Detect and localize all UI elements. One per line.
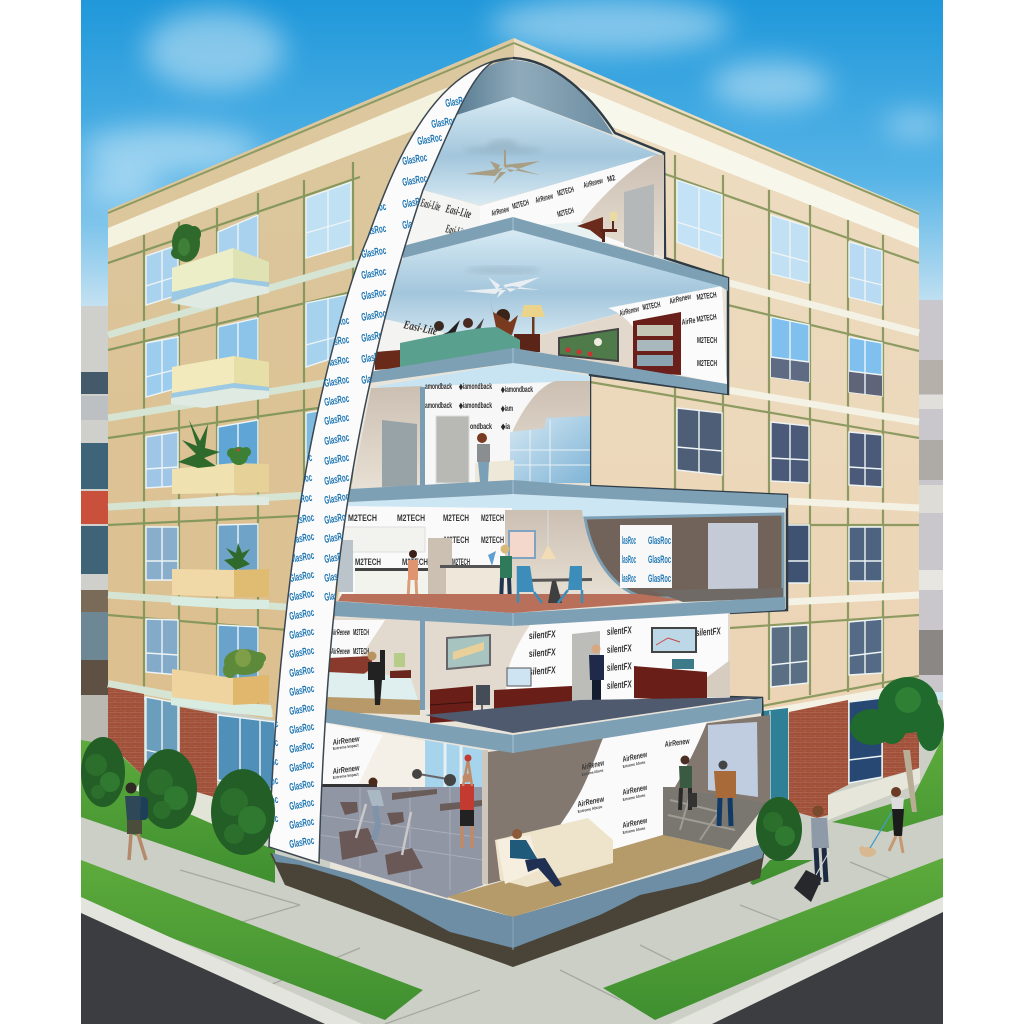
M2Tech text: M2TECH xyxy=(452,557,470,567)
GlasRoc repeating text: GlasRoc xyxy=(288,588,315,604)
left wall windows xyxy=(146,182,351,790)
tree xyxy=(850,677,944,812)
bookcase xyxy=(633,312,681,375)
gym floor xyxy=(318,787,483,898)
M2Tech text: M2TECH xyxy=(402,557,428,567)
brand text xyxy=(402,290,717,368)
GlasRoc repeating text: GlasRoc xyxy=(360,329,387,345)
GlasRoc repeating text: GlasRoc xyxy=(360,223,387,239)
woman with dress xyxy=(368,650,385,705)
brand text: M2TECH xyxy=(556,206,575,219)
AirRenew gym xyxy=(331,734,361,780)
GlasRoc repeating text: GlasRoc xyxy=(288,740,315,756)
dresser xyxy=(430,686,473,723)
GlasRoc repeating text: GlasRoc xyxy=(323,588,350,604)
M2Tech text: M2TECH xyxy=(444,535,469,545)
GlasRoc repeating text: GlasRoc xyxy=(323,432,350,448)
GlasRoc repeating text: GlasRoc xyxy=(323,393,350,409)
ceiling xyxy=(423,97,660,205)
GlasRoc repeating text: GlasRoc xyxy=(323,491,350,507)
GlasRoc repeating text: GlasRoc xyxy=(288,816,315,832)
GlasRoc repeating text: GlasRoc xyxy=(323,472,350,488)
ground floor room: AirRenew xyxy=(621,783,648,797)
silentFX text: silentFX xyxy=(528,647,557,660)
GlasRoc SmartLiner text: GlasRoc xyxy=(648,573,671,585)
parapet right xyxy=(514,60,919,248)
weight bench xyxy=(392,769,482,811)
GlasRoc repeating text: GlasRoc xyxy=(252,680,279,696)
M2Tech text xyxy=(348,513,504,567)
Diamondback text: ondback xyxy=(470,422,492,431)
silentFX text: silentFX xyxy=(606,643,633,656)
AirRenew gym: AirRenew xyxy=(331,734,361,747)
AirRenew text: AirRenew xyxy=(330,628,350,637)
fridge xyxy=(338,540,353,592)
GlasRoc repeating text xyxy=(272,96,465,848)
brand text xyxy=(419,173,617,240)
balcony 3 with plants xyxy=(171,420,269,507)
framed art xyxy=(447,635,490,669)
silentFX text: silentFX xyxy=(606,661,633,674)
lawn upper right xyxy=(750,737,943,885)
ground floor room: Extreme Abuse xyxy=(622,792,646,802)
floor 2 room: M2TECH xyxy=(353,647,369,656)
sofa xyxy=(495,818,613,887)
ground floor room: AirRenew xyxy=(580,758,605,772)
credenza xyxy=(634,659,707,702)
bush 1 xyxy=(81,737,125,807)
GlasRoc repeating text: GlasRoc xyxy=(360,371,387,387)
sofa xyxy=(400,327,520,368)
AirRenew text xyxy=(330,628,369,656)
door xyxy=(572,631,600,702)
Diamondback text: ◆iamondback xyxy=(458,382,492,391)
trim xyxy=(590,155,919,706)
office chair xyxy=(476,685,490,714)
gym back wall xyxy=(323,722,487,790)
GlasRoc repeating text: GlasRoc xyxy=(252,775,279,791)
brand text: M2TECH xyxy=(696,290,717,302)
patterned floor xyxy=(663,787,767,850)
brand text: M2TECH xyxy=(697,336,717,345)
parapet left xyxy=(108,60,514,248)
GlasRoc repeating text: GlasRoc xyxy=(323,412,350,428)
building left wall xyxy=(108,38,514,720)
dark corridor xyxy=(585,514,783,598)
brand text: Easi-Lite xyxy=(444,221,467,240)
bush 4 xyxy=(756,797,802,861)
GlasRoc repeating text: GlasRoc xyxy=(360,201,387,217)
brick base left xyxy=(108,687,217,826)
GlasRoc repeating text: GlasRoc xyxy=(360,245,387,261)
upper cabinets xyxy=(343,527,425,552)
GlasRoc repeating text: GlasRoc xyxy=(288,664,315,680)
pedestrian with suitcase xyxy=(794,806,829,902)
back walls xyxy=(372,318,500,380)
traveller xyxy=(679,756,697,810)
GlasRoc repeating text: GlasRoc xyxy=(288,626,315,642)
Diamondback text: amondback xyxy=(425,382,452,391)
building right wall xyxy=(514,38,919,714)
M2Tech text: M2TECH xyxy=(348,513,377,523)
GlasRoc repeating text: GlasRoc xyxy=(401,152,428,168)
Diamondback text: ◆iamondback xyxy=(500,385,533,394)
floor lamp xyxy=(514,305,545,352)
GlasRoc repeating text: GlasRoc xyxy=(288,531,315,547)
GlasRoc SmartLiner text: GlasRoc xyxy=(648,554,671,566)
floor 2 room xyxy=(325,612,760,733)
GlasRoc repeating text: GlasRoc xyxy=(252,756,279,772)
elliptical machines xyxy=(339,802,423,875)
counter and cabinets xyxy=(355,568,430,571)
GlasRoc repeating text: GlasRoc xyxy=(288,797,315,813)
post xyxy=(482,750,488,884)
balcony 4 with plant xyxy=(171,543,269,609)
M2Tech text: M2TECH xyxy=(481,535,504,545)
GlasRoc repeating text: GlasRoc xyxy=(288,645,315,661)
GlasRoc repeating text: GlasRoc xyxy=(288,778,315,794)
Diamondback text: ◆iamondback xyxy=(458,401,492,410)
pedestrian with dog xyxy=(859,787,904,857)
GlasRoc repeating text: GlasRoc xyxy=(252,718,279,734)
brand text: M2TECH xyxy=(696,312,717,324)
glass shower xyxy=(510,416,590,483)
GlasRoc repeating text: GlasRoc xyxy=(416,132,443,148)
computer xyxy=(507,668,531,686)
GlasRoc SmartLiner text: lasRoc xyxy=(622,535,636,547)
GlasRoc repeating text: GlasRoc xyxy=(252,699,279,715)
GlasRoc repeating text: GlasRoc xyxy=(323,374,350,390)
brand text: AirRenew xyxy=(490,204,510,218)
GlasRoc repeating text: GlasRoc xyxy=(288,512,315,528)
woman green xyxy=(500,544,512,603)
GlasRoc repeating text: GlasRoc xyxy=(360,266,387,282)
GlasRoc repeating text: GlasRoc xyxy=(286,433,313,449)
GlasRoc repeating text: GlasRoc xyxy=(360,287,387,303)
floor slabs xyxy=(323,217,787,753)
GlasRoc repeating text: GlasRoc xyxy=(323,354,350,370)
ground: sidewalk xyxy=(81,695,943,1024)
brand text: M2 xyxy=(606,173,617,184)
GlasRoc repeating text: GlasRoc xyxy=(288,683,315,699)
ground floor room: Extreme Abuse xyxy=(622,825,646,835)
ground floor room: AirRenew xyxy=(621,750,648,764)
ceiling fan xyxy=(465,150,540,184)
brand text: AirRenew xyxy=(668,292,692,306)
AirRenew gym: AirRenew xyxy=(331,763,361,776)
M2Tech text: M2TECH xyxy=(443,513,469,523)
brand text: AirRe xyxy=(680,316,696,327)
brand text: AirRenew xyxy=(534,191,554,205)
roof underside xyxy=(457,60,613,135)
neighbouring building left xyxy=(81,306,111,706)
TV on wall xyxy=(652,628,696,652)
Diamondback text: amondback xyxy=(425,401,452,410)
front lawn right xyxy=(603,858,943,1020)
GlasRoc repeating text: GlasRoc xyxy=(323,530,350,546)
brand text: M2TECH xyxy=(642,300,661,312)
GlasRoc repeating text: GlasRoc xyxy=(323,334,350,350)
floor 4 room xyxy=(352,363,590,488)
pedestrian with backpack xyxy=(125,782,148,860)
GlasRoc wrap strip xyxy=(252,58,513,863)
brand text: M2TECH xyxy=(556,185,575,198)
GlasRoc repeating text: GlasRoc xyxy=(288,569,315,585)
side table xyxy=(375,350,400,370)
silentFX text xyxy=(528,625,722,692)
M2Tech text: M2TECH xyxy=(397,513,425,523)
sky background xyxy=(80,0,947,720)
GlasRoc SmartLiner text: lasRoc xyxy=(622,573,636,585)
brand text: M2TECH xyxy=(511,198,530,211)
cutaway interior xyxy=(270,58,787,967)
GlasRoc repeating text: GlasRoc xyxy=(323,569,350,585)
right wall windows xyxy=(677,180,882,687)
GlasRoc repeating text: GlasRoc xyxy=(323,550,350,566)
GlasRoc SmartLiner text: GlasRoc xyxy=(648,535,671,547)
silentFX text: silentFX xyxy=(606,679,633,692)
woman on elliptical xyxy=(367,778,384,840)
GlasRoc repeating text: GlasRoc xyxy=(360,308,387,324)
man standing xyxy=(589,644,604,707)
ground floor room: Extreme Abuse xyxy=(577,804,603,814)
bedroom xyxy=(328,656,372,700)
tan carpet xyxy=(447,835,730,917)
GlasRoc repeating text: GlasRoc xyxy=(430,115,457,131)
art and vase xyxy=(509,531,535,558)
AirRenew gym: Extreme Impact xyxy=(332,742,359,751)
white AirRenew wall xyxy=(560,728,663,850)
balcony 2 xyxy=(171,356,269,408)
floor 2 room: M2TECH xyxy=(353,628,369,637)
trim xyxy=(108,162,360,716)
floor 5 room xyxy=(372,230,727,385)
balcony 5 with plant xyxy=(171,649,273,717)
door xyxy=(624,184,654,256)
terracotta floor xyxy=(338,594,683,613)
watching people xyxy=(430,298,518,342)
ground floor room: Extreme Abuse xyxy=(622,759,646,769)
GlasRoc repeating text: GlasRoc xyxy=(444,94,471,110)
GlasRoc repeating text: GlasRoc xyxy=(252,813,279,829)
beige room corner xyxy=(578,155,664,258)
bush 2 xyxy=(139,749,197,829)
GlasRoc repeating text: GlasRoc xyxy=(286,452,313,468)
GlasRoc repeating text: GlasRoc xyxy=(288,607,315,623)
silentFX text: silentFX xyxy=(528,629,557,642)
GlasRoc repeating text: GlasRoc xyxy=(286,492,313,508)
silentFX text: silentFX xyxy=(695,626,722,639)
GlasRoc SmartLiner text xyxy=(622,535,671,585)
GlasRoc repeating text: GlasRoc xyxy=(401,195,428,211)
lawn upper left xyxy=(81,740,275,883)
GlasRoc repeating text: GlasRoc xyxy=(288,702,315,718)
foundation xyxy=(270,843,766,967)
ground floor room: Extreme Abuse xyxy=(581,767,604,777)
GlasRoc repeating text: GlasRoc xyxy=(323,452,350,468)
brand text: Easi-Lite xyxy=(402,317,439,338)
front lawn left xyxy=(81,860,423,1020)
GlasRoc repeating text: GlasRoc xyxy=(360,350,387,366)
white back walls xyxy=(400,190,480,262)
M2Tech text: M2TECH xyxy=(355,557,381,567)
door xyxy=(436,416,469,483)
brand text: AirRenew xyxy=(582,176,604,190)
GlasRoc repeating text: GlasRoc xyxy=(252,794,279,810)
silentFX text: silentFX xyxy=(528,665,557,678)
brand text: Easi-Lite xyxy=(444,201,473,221)
dumbbell rack xyxy=(322,784,377,787)
dining table & chairs xyxy=(518,566,592,603)
woman at counter xyxy=(475,433,514,483)
dark carpet xyxy=(425,697,760,733)
ceiling fan shadow xyxy=(463,139,543,154)
ground floor room xyxy=(318,715,770,917)
GlasRoc repeating text: GlasRoc xyxy=(401,216,428,232)
brand text: AirRenew xyxy=(618,304,640,318)
GlasRoc repeating text: GlasRoc xyxy=(288,721,315,737)
elevator xyxy=(708,722,758,797)
bush 3 xyxy=(211,769,275,855)
Diamondback text xyxy=(425,382,533,431)
Diamondback text: ◆ia xyxy=(500,422,510,431)
M2Tech text: M2TECH xyxy=(481,513,504,523)
man with kettlebell xyxy=(460,754,474,848)
roads xyxy=(81,897,943,1024)
brand text: M2TECH xyxy=(697,359,717,368)
ground floor room: AirRenew xyxy=(621,816,648,830)
floor 3 room xyxy=(338,494,783,613)
pendant lamp xyxy=(541,509,556,559)
AirRenew gym: Extreme Impact xyxy=(332,771,359,780)
brand text: Easi-Lite xyxy=(419,195,442,214)
floor 6 room xyxy=(400,97,664,262)
GlasRoc repeating text: GlasRoc xyxy=(288,835,315,851)
silentFX text: silentFX xyxy=(606,625,633,638)
GlasRoc SmartLiner text: lasRoc xyxy=(622,554,636,566)
GlasRoc repeating text: GlasRoc xyxy=(286,472,313,488)
bed and nightstand xyxy=(540,222,604,243)
man in coat xyxy=(714,760,736,826)
ground floor room: AirRenew xyxy=(576,794,605,809)
GlasRoc repeating text: GlasRoc xyxy=(323,315,350,331)
GlasRoc repeating text: GlasRoc xyxy=(323,511,350,527)
ceiling fan xyxy=(463,277,540,298)
Diamondback text: ◆iam xyxy=(500,404,513,413)
TV xyxy=(559,329,618,361)
woman kitchen xyxy=(408,550,418,601)
ground floor room: AirRenew xyxy=(663,737,691,749)
brick base right xyxy=(763,686,920,820)
desk xyxy=(494,686,572,722)
GlasRoc repeating text: GlasRoc xyxy=(252,737,279,753)
balcony 1 with plant xyxy=(171,224,269,309)
GlasRoc repeating text: GlasRoc xyxy=(401,173,428,189)
AirRenew text: AirRenew xyxy=(330,647,350,656)
GlasRoc repeating text: GlasRoc xyxy=(288,759,315,775)
GlasRoc repeating text: GlasRoc xyxy=(288,550,315,566)
seated man xyxy=(510,829,562,887)
neighbouring building right xyxy=(919,300,943,692)
taupe wall xyxy=(488,715,770,884)
